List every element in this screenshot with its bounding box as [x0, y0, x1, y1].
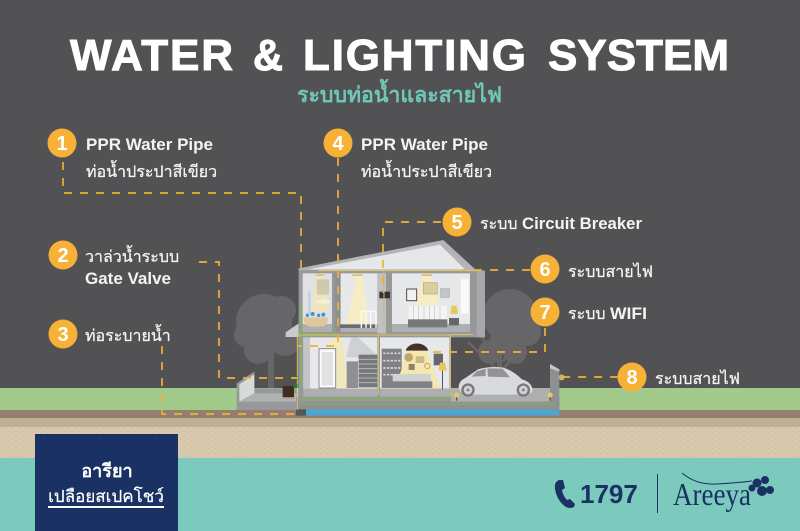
callout 3: 3	[57, 324, 69, 346]
water strip	[306, 409, 559, 416]
callout 7	[425, 298, 647, 352]
callout 4	[298, 128, 492, 346]
callout 7: WIFI	[610, 304, 647, 323]
divider	[657, 474, 658, 513]
callout 1: ท่อน้ำประปาสีเขียว	[86, 160, 217, 181]
callout 3	[48, 320, 298, 414]
garden lights	[454, 374, 565, 401]
callout 5: 5	[451, 212, 463, 234]
house illustration	[237, 240, 565, 416]
callout 2: 2	[57, 245, 69, 267]
callout 8: ระบบสายไฟ	[655, 369, 740, 388]
callout 5: Circuit Breaker	[522, 214, 642, 233]
subtitle: ระบบท่อน้ำและสายไฟ	[297, 78, 502, 107]
callout 3: ท่อระบายน้ำ	[85, 324, 171, 345]
title: &	[253, 31, 283, 80]
car	[459, 367, 533, 397]
navy badge	[35, 434, 178, 531]
callout 1	[48, 128, 301, 270]
callout 2: Gate Valve	[85, 269, 171, 288]
ground floor	[298, 335, 451, 402]
phone number: 1797	[580, 479, 638, 509]
wiring	[297, 270, 555, 410]
front yard wall	[237, 372, 297, 410]
navy badge: อารียา	[81, 461, 133, 481]
callout 1: PPR Water Pipe	[86, 135, 213, 154]
title: SYSTEM	[548, 31, 729, 80]
trees	[234, 289, 541, 388]
callout 5: ระบบ	[480, 216, 518, 233]
callout 4: ท่อน้ำประปาสีเขียว	[361, 160, 492, 181]
callout 2: วาล่วน้ำระบบ	[85, 245, 179, 266]
navy badge: เปลือยสเปคโชว์	[48, 486, 164, 506]
upper floor	[286, 271, 485, 337]
footer band	[0, 458, 800, 531]
callout 8	[560, 362, 740, 392]
callout 6	[462, 254, 653, 284]
callout 4: PPR Water Pipe	[361, 135, 488, 154]
callout 6: ระบบสายไฟ	[568, 262, 653, 281]
phone icon	[555, 480, 575, 508]
callout 7: 7	[539, 302, 551, 324]
foundation	[296, 364, 559, 410]
callout 5	[383, 208, 642, 293]
title: WATER	[70, 31, 233, 80]
callout 4: 4	[332, 133, 344, 155]
callout 7: ระบบ	[568, 306, 606, 323]
callout 1: 1	[56, 133, 68, 155]
valves	[293, 376, 297, 388]
title: LIGHTING	[303, 31, 526, 80]
callout 8: 8	[626, 367, 638, 389]
roof	[299, 240, 477, 271]
callout 2	[48, 240, 298, 378]
callout 6: 6	[539, 259, 551, 281]
title	[70, 31, 729, 80]
areeya logo: Areeya	[673, 476, 751, 512]
ground layers	[0, 388, 800, 458]
